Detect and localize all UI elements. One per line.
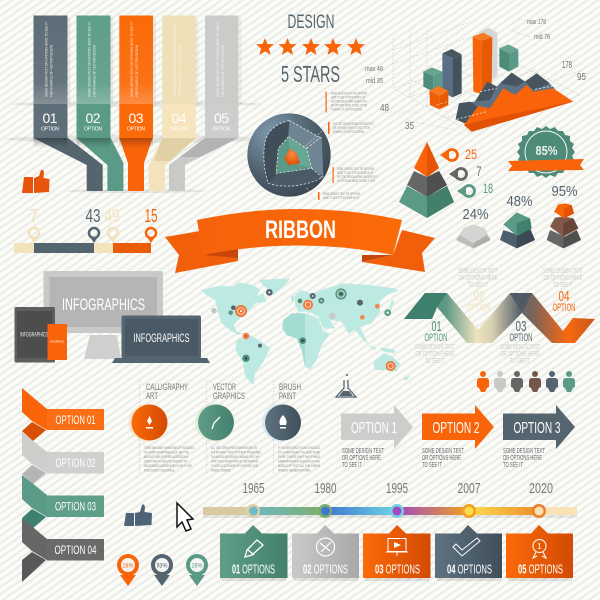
technique: calligraphy art: EVEN SLIGHTLY BELIEVABLE. [144, 468, 175, 472]
option 02: 02 [474, 288, 484, 305]
column 03: FOR EXAMPLE OF VECTOR DESIGN [135, 45, 139, 97]
panel: three technique columns [128, 380, 321, 473]
technique: calligraphy art: SOME FORM, BY INJECTED HUMOUR, OR [144, 460, 187, 464]
option 01: 01 [432, 318, 442, 335]
phone [48, 324, 67, 360]
desktop monitor [44, 271, 163, 359]
column 01: 01 [42, 110, 58, 126]
green right bar [499, 44, 518, 72]
chart labels: 48 [380, 102, 389, 114]
column 04: FOR EXAMPLE OF VECTOR DESIGN [178, 45, 182, 97]
arrow option 3: TO SEE IT [503, 462, 523, 469]
panel: five vertical option columns [6, 16, 266, 193]
column 04: OPTION [170, 126, 188, 132]
column 02: FOR EXAMPLE OF VECTOR DESIGN [92, 45, 96, 97]
card 04 options: 04 OPTIONS [447, 562, 492, 576]
technique: calligraphy art: MAJORITY HAVE SUFFERED ALTERATION IN [144, 455, 188, 459]
option 03: OR OPTIONS HERE [500, 351, 540, 358]
map-pin percent markers [117, 554, 208, 586]
person brown [529, 371, 541, 392]
map markers [211, 288, 396, 371]
callout notes around sphere [318, 92, 378, 200]
option 02: SOME DESIGN TEXT [458, 268, 498, 275]
pin 16%: 16% [192, 562, 203, 570]
chart labels: max 178 [527, 19, 546, 26]
pin 15 [144, 206, 158, 243]
option 01: TO SEE IT [425, 358, 445, 365]
chart labels: max 48 [365, 66, 383, 73]
note 3 [332, 167, 378, 183]
person orange [477, 371, 489, 392]
sphere diagram [247, 113, 335, 200]
technique: calligraphy art [128, 382, 194, 472]
technique: vector graphics: WORDS, COMBINED [211, 468, 231, 472]
technique: vector graphics: FIRST TRUE GENERATOR ON THE INTERNET. [211, 460, 259, 464]
badge: 85% seal with ribbon [508, 126, 584, 178]
person dark grey [511, 371, 523, 392]
pin 49 [104, 206, 120, 243]
small orange cube [429, 86, 448, 109]
five stars [256, 38, 365, 55]
ribbon option 03 [22, 475, 104, 528]
note 2: EXAMPLE OF VECTOR DESIGN [333, 130, 364, 134]
arrow option 3: OPTION 3 [514, 420, 561, 437]
card 04 options [435, 525, 502, 581]
arrow option 2: TO SEE IT [422, 462, 442, 469]
ribbon option 01: OPTION 01 [56, 413, 96, 427]
column 05: SOME DESIGN TEXT OR OPTIONS HERE TO SEE IT [216, 22, 220, 97]
chart labels [365, 19, 586, 132]
timeline [203, 480, 577, 518]
technique: calligraphy art: CALLIGRAPHY [146, 382, 188, 393]
dark blue bar [442, 49, 462, 97]
column 05: 05 [214, 110, 229, 126]
isometric stack 24%: 24% [462, 206, 488, 223]
note 4: SOME DESIGN TEXT OR OPTIONS [323, 192, 360, 196]
icon: blue thumbs up [124, 504, 152, 526]
note 4: HERE TO SEE IT FOR EXAMPLE OF [323, 196, 359, 200]
arrow option 1: SOME DESIGN TEXT [342, 448, 384, 455]
technique: vector graphics [195, 382, 261, 472]
technique: brush paint: BRUSH [279, 382, 301, 393]
chart: layered pyramid [399, 142, 493, 218]
pyramid value 25: 25 [465, 146, 477, 162]
pin 15: 15 [144, 206, 158, 226]
banner: ribbon: RIBBON [265, 216, 336, 244]
node 2007: 2007 [458, 480, 480, 497]
icon: orange thumbs up [22, 170, 50, 193]
ribbon option 02: OPTION 02 [56, 456, 96, 470]
zigzag ribbon with four options [404, 268, 595, 365]
technique: brush paint: SURE THERE ISN'T ANYTHING [278, 455, 320, 459]
option 04: 04 [558, 288, 570, 305]
ribbon option 04 [22, 518, 104, 582]
pin 43: 43 [86, 206, 100, 226]
heading: design 5 stars: 5 STARS [281, 61, 340, 87]
technique: calligraphy art: ART [146, 391, 158, 402]
arrow option 2 [422, 405, 494, 469]
note 3: OR OPTIONS HERE TO SEE IT FOR [337, 179, 375, 183]
laptop: INFOGRAPHICS [134, 333, 190, 345]
column 02 [76, 16, 123, 191]
pyramid value 18: 18 [483, 180, 493, 196]
column 01: SOME DESIGN TEXT OR OPTIONS HERE TO SEE IT [44, 22, 48, 97]
pin 43 [86, 206, 100, 243]
technique: brush paint: EMBARRASSING HIDDEN IN THE [278, 460, 321, 464]
panel: option arrows [341, 405, 575, 469]
card 02 options [292, 525, 359, 581]
isometric stack 95%: 95% [552, 183, 578, 200]
heading: design 5 stars [256, 12, 365, 87]
phone: INFOGRAPHICS [50, 340, 64, 344]
column 03: OPTION [127, 126, 145, 132]
isometric stack 48%: 48% [506, 193, 532, 210]
chart labels: mid 35 [366, 78, 383, 85]
pin 93%: 93% [156, 562, 168, 570]
note 1: OR OPTIONS HERE TO SEE IT FOR [331, 104, 367, 108]
chart labels: 178 [562, 60, 572, 71]
column 02: SOME DESIGN TEXT OR OPTIONS HERE TO SEE IT [88, 22, 92, 97]
technique: vector graphics: ALL THE LOREM IPSUM GENERATORS ON [211, 446, 257, 450]
technique: brush paint: OF LOREM IPSUM, YOU NEED TO BE [278, 450, 321, 454]
option 01 [415, 318, 455, 365]
technique: brush paint: IPSUM GENERATORS. [278, 468, 311, 472]
note 1: SOME DESIGN TEXT OR OPTIONS [331, 92, 367, 96]
grey bar back [478, 27, 497, 80]
arrow option 1: OPTION 1 [351, 420, 397, 437]
column 02: OPTION [84, 126, 102, 132]
pin 7: 7 [29, 206, 39, 226]
column 03 [119, 16, 153, 191]
world map [201, 278, 410, 385]
column 03: 03 [128, 110, 144, 126]
icon: mouse cursor [177, 503, 193, 531]
person grey [494, 371, 506, 392]
arrow option 3 [503, 405, 575, 469]
note 2: VECTOR DESIGN SOME DESIGN TEXT [333, 122, 374, 126]
option 01: SOME DESIGN TEXT [415, 344, 455, 351]
node 2020 [529, 480, 553, 518]
note 1: HERE TO SEE IT FOR EXAMPLE OF [331, 96, 365, 100]
card 05 options: 05 OPTIONS [518, 562, 563, 576]
option 03 [500, 318, 540, 365]
desktop monitor: INFOGRAPHICS [62, 295, 145, 314]
pin 49: 49 [104, 206, 120, 226]
ribbon option 01 [22, 388, 104, 441]
ribbon option 02 [22, 432, 104, 484]
pyramid value 7: 7 [476, 163, 482, 179]
panel: folded option ribbons [22, 388, 104, 582]
column 04: SOME DESIGN TEXT OR OPTIONS HERE TO SEE IT [173, 22, 177, 97]
note 2: OR OPTIONS HERE TO SEE IT FOR [333, 126, 370, 130]
option 02 [458, 268, 498, 314]
technique: brush paint [262, 382, 321, 472]
option 04: TO SEE IT [553, 282, 573, 289]
note 2 [328, 122, 374, 134]
person green [563, 371, 575, 392]
option 01: OR OPTIONS HERE [416, 351, 455, 358]
arrow option 1: OR OPTIONS HERE [342, 455, 381, 462]
heading: design 5 stars: DESIGN [288, 12, 334, 33]
isometric stack 48% [500, 193, 535, 248]
technique: vector graphics: CHUNKS AS NECESSARY, MAKING THIS THE [211, 455, 259, 459]
ribbon option 03: OPTION 03 [55, 500, 96, 514]
chart labels: 35 [405, 120, 414, 132]
technique: vector graphics: THE INTERNET TEND TO REPEAT PREDEFINED [211, 450, 261, 454]
tablet [14, 307, 55, 362]
card 05 options [506, 525, 573, 581]
column 04: 04 [172, 110, 187, 126]
arrow option 3: SOME DESIGN TEXT [503, 448, 545, 455]
option 02: OR OPTIONS HERE [458, 275, 498, 282]
isometric stack 24% [456, 206, 491, 248]
node 1980: 1980 [314, 480, 336, 497]
technique: vector graphics: GRAPHICS [213, 391, 245, 402]
badge: 85% seal with ribbon: 85% [536, 143, 558, 158]
technique: vector graphics: IT USES A DICTIONARY OF OVER 200 LATIN [211, 464, 258, 468]
node 2020: 2020 [529, 480, 553, 497]
arrow option 1: TO SEE IT [342, 462, 362, 469]
devices mockup [14, 271, 210, 363]
card 03 options: 03 OPTIONS [375, 562, 420, 576]
person slate [546, 371, 558, 392]
note 3: VECTOR DESIGN SOME DESIGN TEXT [337, 175, 378, 179]
technique: calligraphy art: THERE ARE MANY VARIATIONS OF PASSAGES [144, 446, 194, 450]
column 05 [169, 16, 238, 191]
note 1 [326, 92, 367, 112]
option 04: OPTION [552, 302, 576, 314]
pin 18%: 18% [122, 562, 134, 570]
note 1: VECTOR DESIGN SOME DESIGN TEXT [331, 100, 367, 104]
node 1980 [314, 480, 336, 518]
card 01 options [220, 525, 288, 581]
option 03: OPTION [510, 332, 533, 344]
people row [477, 371, 575, 392]
panel: timeline option cards [220, 525, 573, 581]
note 1: EXAMPLE OF VECTOR DESIGN [331, 108, 362, 112]
node 1965 [242, 480, 264, 518]
icon: flask [336, 374, 356, 397]
technique: calligraphy art: RANDOMISED WORDS WHICH DON'T LOOK [144, 464, 192, 468]
laptop [112, 316, 210, 363]
arrow option 2: OR OPTIONS HERE [422, 455, 461, 462]
column 01 [34, 16, 103, 191]
chart: isometric 3D bars and mountain [365, 19, 586, 133]
note 3: SOME DESIGN TEXT OR OPTIONS [337, 167, 374, 171]
option 03: 03 [516, 318, 526, 335]
node 1995: 1995 [386, 480, 408, 497]
arrow option 2: OPTION 2 [432, 420, 480, 437]
column 03: SOME DESIGN TEXT OR OPTIONS HERE TO SEE IT [130, 22, 134, 97]
option 04 [543, 268, 583, 314]
card 05 options: 1 [537, 542, 542, 551]
ribbon option 04: OPTION 04 [54, 543, 97, 557]
arrow option 1 [341, 405, 413, 469]
card 02 options: 02 OPTIONS [303, 562, 348, 576]
option 01: OPTION [424, 332, 448, 344]
node 1995 [386, 480, 408, 518]
column 05: OPTION [212, 126, 231, 132]
tablet: INFOGRAPHICS [20, 332, 48, 338]
technique: brush paint: PAINT [279, 391, 296, 402]
node 2007 [458, 480, 480, 518]
technique: calligraphy art: OF LOREM IPSUM AVAILABLE, BUT THE [144, 450, 190, 454]
pin 7 [29, 206, 39, 243]
column 02: 02 [86, 110, 101, 126]
technique: brush paint: IF YOU ARE GOING TO USE A PASSAGE [278, 446, 320, 450]
column 04 [149, 16, 196, 191]
chart labels: mid 78 [534, 34, 550, 41]
arrow option 3: OR OPTIONS HERE [503, 455, 542, 462]
chart labels: 95 [577, 72, 586, 83]
option 03: SOME DESIGN TEXT [500, 344, 540, 351]
card 01 options: 01 OPTIONS [232, 562, 275, 576]
option 02: OPTION [468, 302, 491, 314]
column 01: FOR EXAMPLE OF VECTOR DESIGN [50, 45, 54, 97]
green left bar [423, 67, 442, 92]
mountain chart [456, 73, 573, 132]
arrow option 2: SOME DESIGN TEXT [422, 448, 464, 455]
column 01: OPTION [41, 126, 59, 132]
isometric stack 95% [547, 183, 581, 248]
technique: brush paint: MIDDLE OF TEXT. ALL THE LOREM [278, 464, 320, 468]
technique: vector graphics: VECTOR [213, 382, 236, 393]
chart: pin bar with values [14, 206, 158, 253]
note 3: HERE TO SEE IT FOR EXAMPLE OF [337, 171, 373, 175]
orange tall bar [473, 33, 492, 94]
column 05: FOR EXAMPLE OF VECTOR DESIGN [221, 45, 225, 97]
option 02: TO SEE IT [468, 282, 488, 289]
option 03: TO SEE IT [510, 358, 530, 365]
note 4 [318, 192, 360, 200]
card 03 options [363, 525, 430, 581]
banner: ribbon [165, 209, 435, 273]
node 1965: 1965 [242, 480, 264, 497]
